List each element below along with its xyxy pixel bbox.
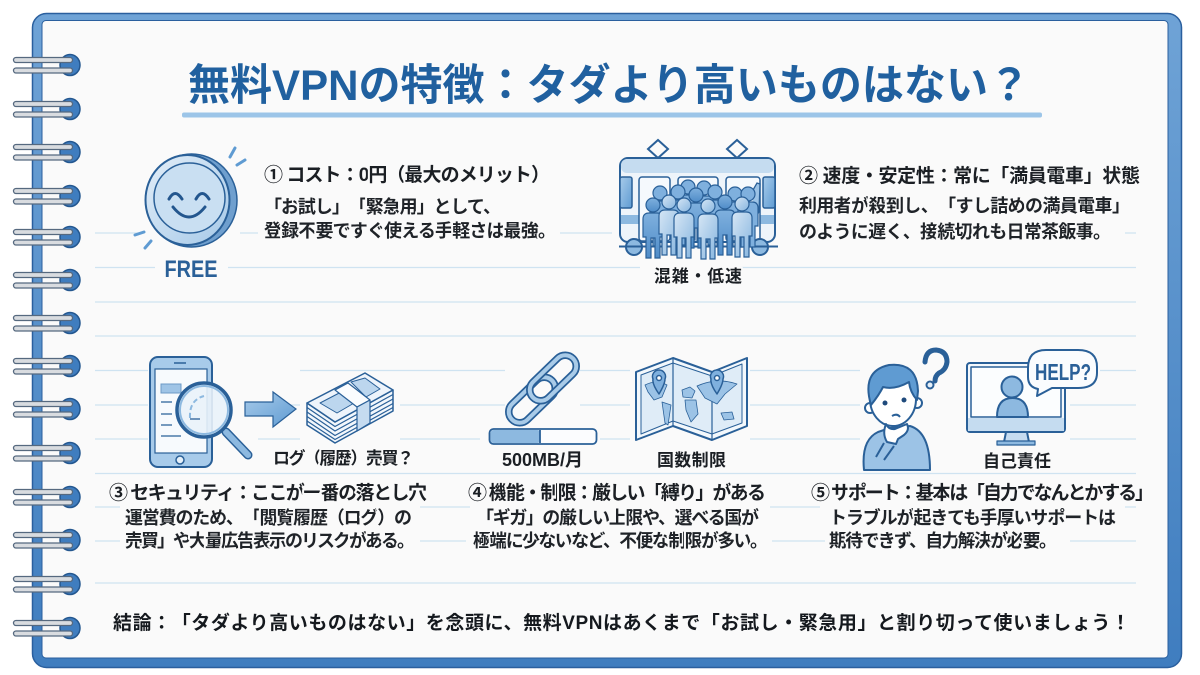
FREE label: FREE bbox=[164, 256, 218, 283]
HELP bubble text: HELP? bbox=[1035, 359, 1091, 385]
panel: cost bbox=[135, 148, 556, 283]
body text: のように遅く、接続切れも日常茶飯事。 bbox=[799, 221, 1111, 242]
icon: confused person bbox=[864, 350, 947, 470]
body text bbox=[125, 507, 415, 551]
body text bbox=[264, 196, 556, 241]
body text: 「お試し」「緊急用」として、 bbox=[264, 196, 501, 217]
heading: ⑤ サポート：基本は「自力でなんとかする」 bbox=[811, 481, 1154, 504]
heading: ④ 機能・制限：厳しい「縛り」がある bbox=[468, 481, 766, 504]
heading: ① コスト：0円（最大のメリット） bbox=[264, 164, 550, 186]
body text: 期待できず、自力解決が必要。 bbox=[829, 530, 1057, 551]
train caption: 混雑・低速 bbox=[654, 267, 742, 286]
heading: ③ セキュリティ：ここが一番の落とし穴 bbox=[109, 481, 427, 504]
panel: speed bbox=[619, 140, 1140, 286]
body text: 売買」や大量広告表示のリスクがある。 bbox=[125, 530, 415, 551]
title: 無料VPNの特徴：タダより高いものはない？ bbox=[188, 62, 1030, 110]
body text: 利用者が殺到し、「すし詰めの満員電車」 bbox=[799, 195, 1130, 216]
body text: トラブルが起きても手厚いサポートは bbox=[829, 507, 1116, 528]
map caption: 国数制限 bbox=[657, 451, 726, 470]
body text bbox=[473, 507, 768, 551]
panel: security bbox=[109, 357, 427, 551]
title underline bbox=[182, 112, 1042, 118]
icon: world map bbox=[636, 358, 747, 440]
icon: chain link bbox=[504, 351, 581, 427]
body text bbox=[829, 507, 1116, 551]
500MB caption: 500MB/月 bbox=[502, 450, 583, 470]
icon: stack of money bbox=[307, 373, 393, 443]
spiral rings bbox=[14, 54, 80, 638]
panel: features bbox=[468, 351, 768, 551]
icon: crowded train bbox=[619, 140, 778, 259]
panel: support bbox=[811, 350, 1154, 551]
money caption: ログ（履歴）売買？ bbox=[273, 448, 414, 468]
heading: ② 速度・安定性：常に「満員電車」状態 bbox=[799, 164, 1140, 187]
arrow bbox=[245, 392, 296, 427]
body text bbox=[799, 195, 1130, 242]
conclusion: 結論：「タダより高いものはない」を念頭に、無料VPNはあくまで「お試し・緊急用」と割り切って使いましょう！ bbox=[113, 611, 1130, 634]
body text: 「ギガ」の厳しい上限や、選べる国が bbox=[476, 507, 759, 528]
icon: smiling coin bbox=[135, 148, 245, 248]
body text: 運営費のため、「閲覧履歴（ログ）の bbox=[125, 507, 412, 528]
body text: 登録不要ですぐ使える手軽さは最強。 bbox=[264, 221, 556, 241]
data limit bar bbox=[490, 429, 596, 444]
ruled lines bbox=[95, 233, 1136, 583]
body text: 極端に少ないなど、不便な制限が多い。 bbox=[473, 530, 768, 551]
monitor caption: 自己責任 bbox=[983, 451, 1051, 471]
icon: help monitor bbox=[967, 350, 1097, 445]
icon: phone with magnifier bbox=[150, 357, 248, 467]
